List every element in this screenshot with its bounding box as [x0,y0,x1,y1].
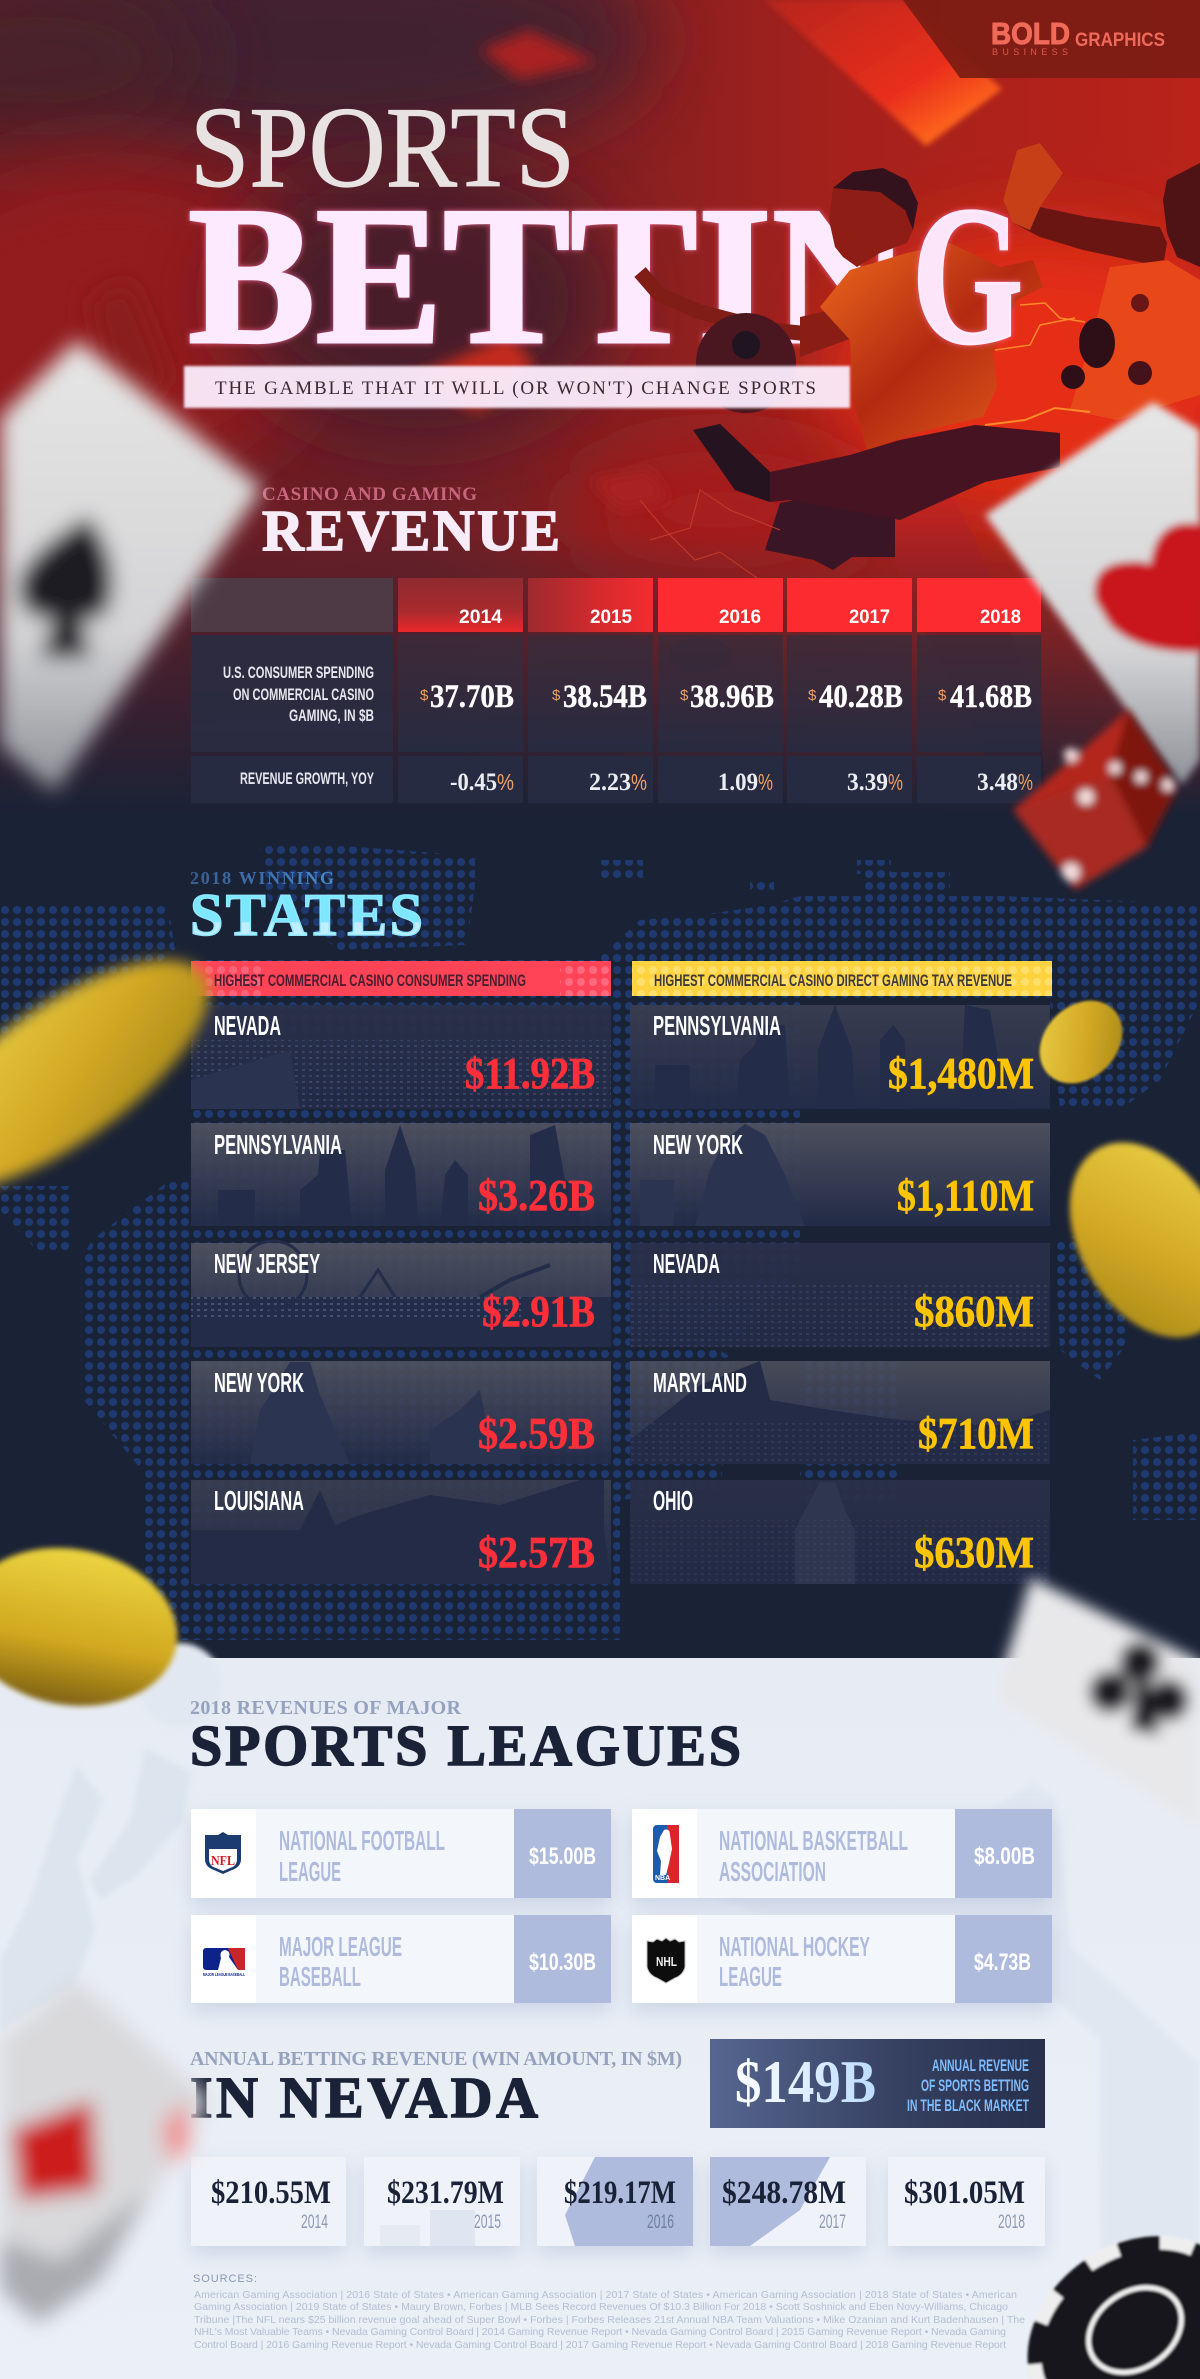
panel: highest consumer spending [191,961,611,1584]
subtitle banner: THE GAMBLE THAT IT WILL (OR WON'T) CHANGE SPORTS [215,378,816,399]
sources: American Gaming Association | 2016 State of States • American Gaming Association | 2017 State of States • American Gaming Association | 2018 State of States • American [194,2289,1017,2301]
states heading: 2018 WINNING [190,868,334,888]
league card: NBA [632,1809,1052,1898]
card: 2018: 2018 [998,2212,1025,2233]
sources: NHL's Most Valuable Teams • Nevada Gaming Control Board | 2014 Gaming Revenue Report • Nevada Gaming Control Board | 2015 Gaming Revenue Report • Nevada Gaming [194,2326,1006,2338]
card: 2018: $301.05M [904,2175,1025,2211]
league card: NBA: $8.00B [974,1843,1035,1870]
icon: NFL shield: NFL [211,1854,235,1869]
row: Pennsylvania: PENNSYLVANIA [653,1010,781,1041]
title: SPORTS: SPORTS [190,84,575,211]
row: Pennsylvania [630,1005,1050,1109]
card: 2016: 2016 [647,2212,674,2233]
pale crowd silhouettes [0,1643,1200,2290]
card: 2018 [888,2157,1045,2246]
sources: SOURCES: [193,2273,257,2285]
Nevada heading [190,2048,682,2130]
league card: NFL: $15.00B [529,1843,596,1870]
banner: consumer spending: HIGHEST COMMERCIAL CASINO CONSUMER SPENDING [214,971,526,990]
coin: small right [1023,984,1139,1100]
consumer spending row: $ [552,687,561,704]
consumer spending row: ON COMMERCIAL CASINO [233,685,374,704]
consumer spending row: 40.28B [819,679,903,715]
revenue growth row: % [631,769,647,795]
sources: Control Board | 2016 Gaming Revenue Report • Nevada Gaming Control Board | 2017 Gaming Revenue Report • Nevada Gaming Control Board | 2018 Gaming Revenue Report [194,2339,1006,2351]
consumer spending row: $ [938,687,947,704]
row: Nevada: NEVADA [653,1248,720,1279]
revenue table [191,578,1041,803]
card: 2017: 2017 [819,2212,846,2233]
card: 2014 [191,2157,346,2246]
card: 2016: $219.17M [564,2175,676,2211]
logo corner: Bold Business Graphics: BUSINESS [992,47,1068,57]
league card: NBA: ASSOCIATION [719,1856,826,1887]
coin: large right [1037,1114,1200,1366]
coin: upper left [0,919,242,1231]
title: BETTING letters B to N: BETTIN [188,166,910,385]
sports leagues heading: 2018 REVENUES OF MAJOR [190,1697,462,1719]
row: New York: $2.59B [478,1409,595,1458]
row: New Jersey [191,1241,611,1347]
table header row: 2014 [459,607,502,628]
row: Maryland [630,1361,1050,1464]
revenue growth row: REVENUE GROWTH, YOY [240,769,374,788]
league card: MLB: MAJOR LEAGUE [279,1931,402,1962]
consumer spending row: 41.68B [950,679,1032,715]
banner: consumer spending [191,961,611,996]
icon: MLB logo: MAJOR LEAGUE BASEBALL [203,1972,245,1977]
league card: NFL [191,1809,611,1898]
row: Louisiana [191,1480,611,1584]
revenue growth row: % [758,769,773,795]
revenue growth row: % [888,769,903,795]
league card: MLB: BASEBALL [279,1961,361,1992]
icon: NBA logo: NBA [655,1875,670,1882]
table header row: 2018 [980,607,1021,628]
consumer spending row: 38.96B [690,679,774,715]
league card: NHL: LEAGUE [719,1961,782,1992]
row: Louisiana: $2.57B [478,1528,595,1577]
row: Ohio [630,1480,1050,1584]
red dice [1013,710,1178,890]
sources [193,2273,1025,2351]
table header row: 2015 [590,607,632,628]
playing card: diamond [0,1979,210,2323]
blurred falling banknotes [90,0,1002,510]
row: New York: $1,110M [897,1171,1034,1220]
card: 2015: $231.79M [387,2175,504,2211]
row: Pennsylvania: PENNSYLVANIA [214,1129,342,1160]
consumer spending row [191,635,1041,752]
table header row: 2016 [719,607,761,628]
row: New Jersey: $2.91B [482,1287,595,1336]
icon: NBA logo [653,1825,679,1883]
revenue growth row: 3.48 [977,769,1018,796]
revenue growth row: -0.45 [450,769,497,796]
row: Pennsylvania: $1,480M [888,1049,1034,1098]
sources: Gaming Association | 2019 State of States • Maury Brown, Forbes | MLB Sees Record Revenues Of $10.3 Billion For 2018 • Scott Soshnick and Eben Novy-Williams, Chicago [194,2301,1008,2313]
row: Ohio: $630M [914,1528,1034,1577]
playing card: club [994,1578,1200,1828]
league card: NFL: LEAGUE [279,1856,341,1887]
league card: MLB [191,1915,611,2003]
row: New York: NEW YORK [653,1129,743,1160]
revenue growth row [191,756,1041,803]
row: Pennsylvania [191,1123,611,1226]
league card: MLB: $10.30B [529,1949,596,1976]
consumer spending row: U.S. CONSUMER SPENDING [223,663,374,682]
callout: black market revenue: $149B [735,2049,876,2115]
coin: lower left [0,1531,190,1723]
row: Louisiana: LOUISIANA [214,1485,304,1516]
revenue growth row: % [497,769,514,795]
card: 2016 [537,2157,693,2246]
states heading: STATES [190,882,423,948]
consumer spending row: $ [808,687,817,704]
logo corner: Bold Business Graphics: GRAPHICS [1075,30,1165,51]
league card: NHL [632,1915,1052,2003]
logo corner: Bold Business Graphics [903,0,1200,78]
row: Nevada: $11.92B [465,1049,595,1098]
sports leagues heading: SPORTS LEAGUES [190,1713,741,1778]
dotted world map [0,846,1200,1640]
consumer spending row: 37.70B [430,679,514,715]
callout: black market revenue: IN THE BLACK MARKET [907,2096,1029,2115]
icon: MLB logo [203,1948,245,1977]
row: New York [630,1123,1050,1226]
poker chip [989,2195,1200,2379]
revenue growth row: % [1018,769,1033,795]
Nevada heading: IN NEVADA [190,2065,538,2130]
row: New Jersey: NEW JERSEY [214,1248,320,1279]
Nevada heading: ANNUAL BETTING REVENUE (WIN AMOUNT, IN $M) [190,2048,682,2070]
card: 2015: 2015 [474,2212,501,2233]
league card: NFL: NATIONAL FOOTBALL [279,1825,445,1856]
league card: NHL: NATIONAL HOCKEY [719,1931,870,1962]
revenue heading: CASINO AND GAMING [262,484,477,505]
card: 2015 [364,2157,520,2246]
banner: gaming tax revenue: HIGHEST COMMERCIAL CASINO DIRECT GAMING TAX REVENUE [654,971,1012,990]
Nevada yearly revenue cards [191,2157,1045,2246]
callout: black market revenue [710,2039,1045,2128]
league card: NBA: NATIONAL BASKETBALL [719,1825,908,1856]
icon: NHL shield: NHL [656,1954,677,1969]
playing card: spade [0,340,262,792]
card: 2017: $248.78M [722,2175,846,2211]
title: BETTING letter G: G [912,166,1023,385]
sources: Tribune |The NFL nears $25 billion revenue goal ahead of Super Bowl • Forbes | Forbes Releases 21st Annual NBA Team Valuations • Mike Ozanian and Kurt Badenhausen | The [194,2314,1025,2326]
card: 2017 [710,2157,866,2246]
subtitle banner [184,366,850,408]
league card: NHL: $4.73B [974,1949,1031,1976]
revenue growth row: 3.39 [847,769,888,796]
row: Nevada [191,1005,611,1109]
consumer spending row: GAMING, IN $B [289,706,374,725]
row: New York [191,1361,611,1464]
table header row: 2017 [849,607,890,628]
row: Nevada: NEVADA [214,1010,281,1041]
icon: NFL shield [205,1832,241,1874]
card: 2014: 2014 [301,2212,328,2233]
card: 2014: $210.55M [211,2175,331,2211]
row: New York: NEW YORK [214,1367,304,1398]
callout: black market revenue: OF SPORTS BETTING [921,2076,1029,2095]
row: Maryland: MARYLAND [653,1367,747,1398]
icon: NHL shield [647,1938,685,1983]
row: Nevada [630,1243,1050,1347]
consumer spending row: $ [420,687,429,704]
row: Ohio: OHIO [653,1485,693,1516]
revenue heading: REVENUE [262,498,560,563]
revenue growth row: 2.23 [589,769,631,796]
playing card: heart [985,402,1200,785]
revenue growth row: 1.09 [718,769,758,796]
logo corner: Bold Business Graphics: BOLD [991,16,1070,51]
row: Pennsylvania: $3.26B [478,1171,595,1220]
row: Nevada: $860M [914,1287,1034,1336]
row: Maryland: $710M [918,1409,1034,1458]
consumer spending row: $ [680,687,689,704]
banner: gaming tax revenue [632,961,1052,996]
consumer spending row: 38.54B [563,679,647,715]
panel: highest gaming tax revenue [630,961,1052,1584]
table header row [191,578,1041,632]
callout: black market revenue: ANNUAL REVENUE [932,2056,1029,2075]
soccer players illustration [640,143,1200,790]
